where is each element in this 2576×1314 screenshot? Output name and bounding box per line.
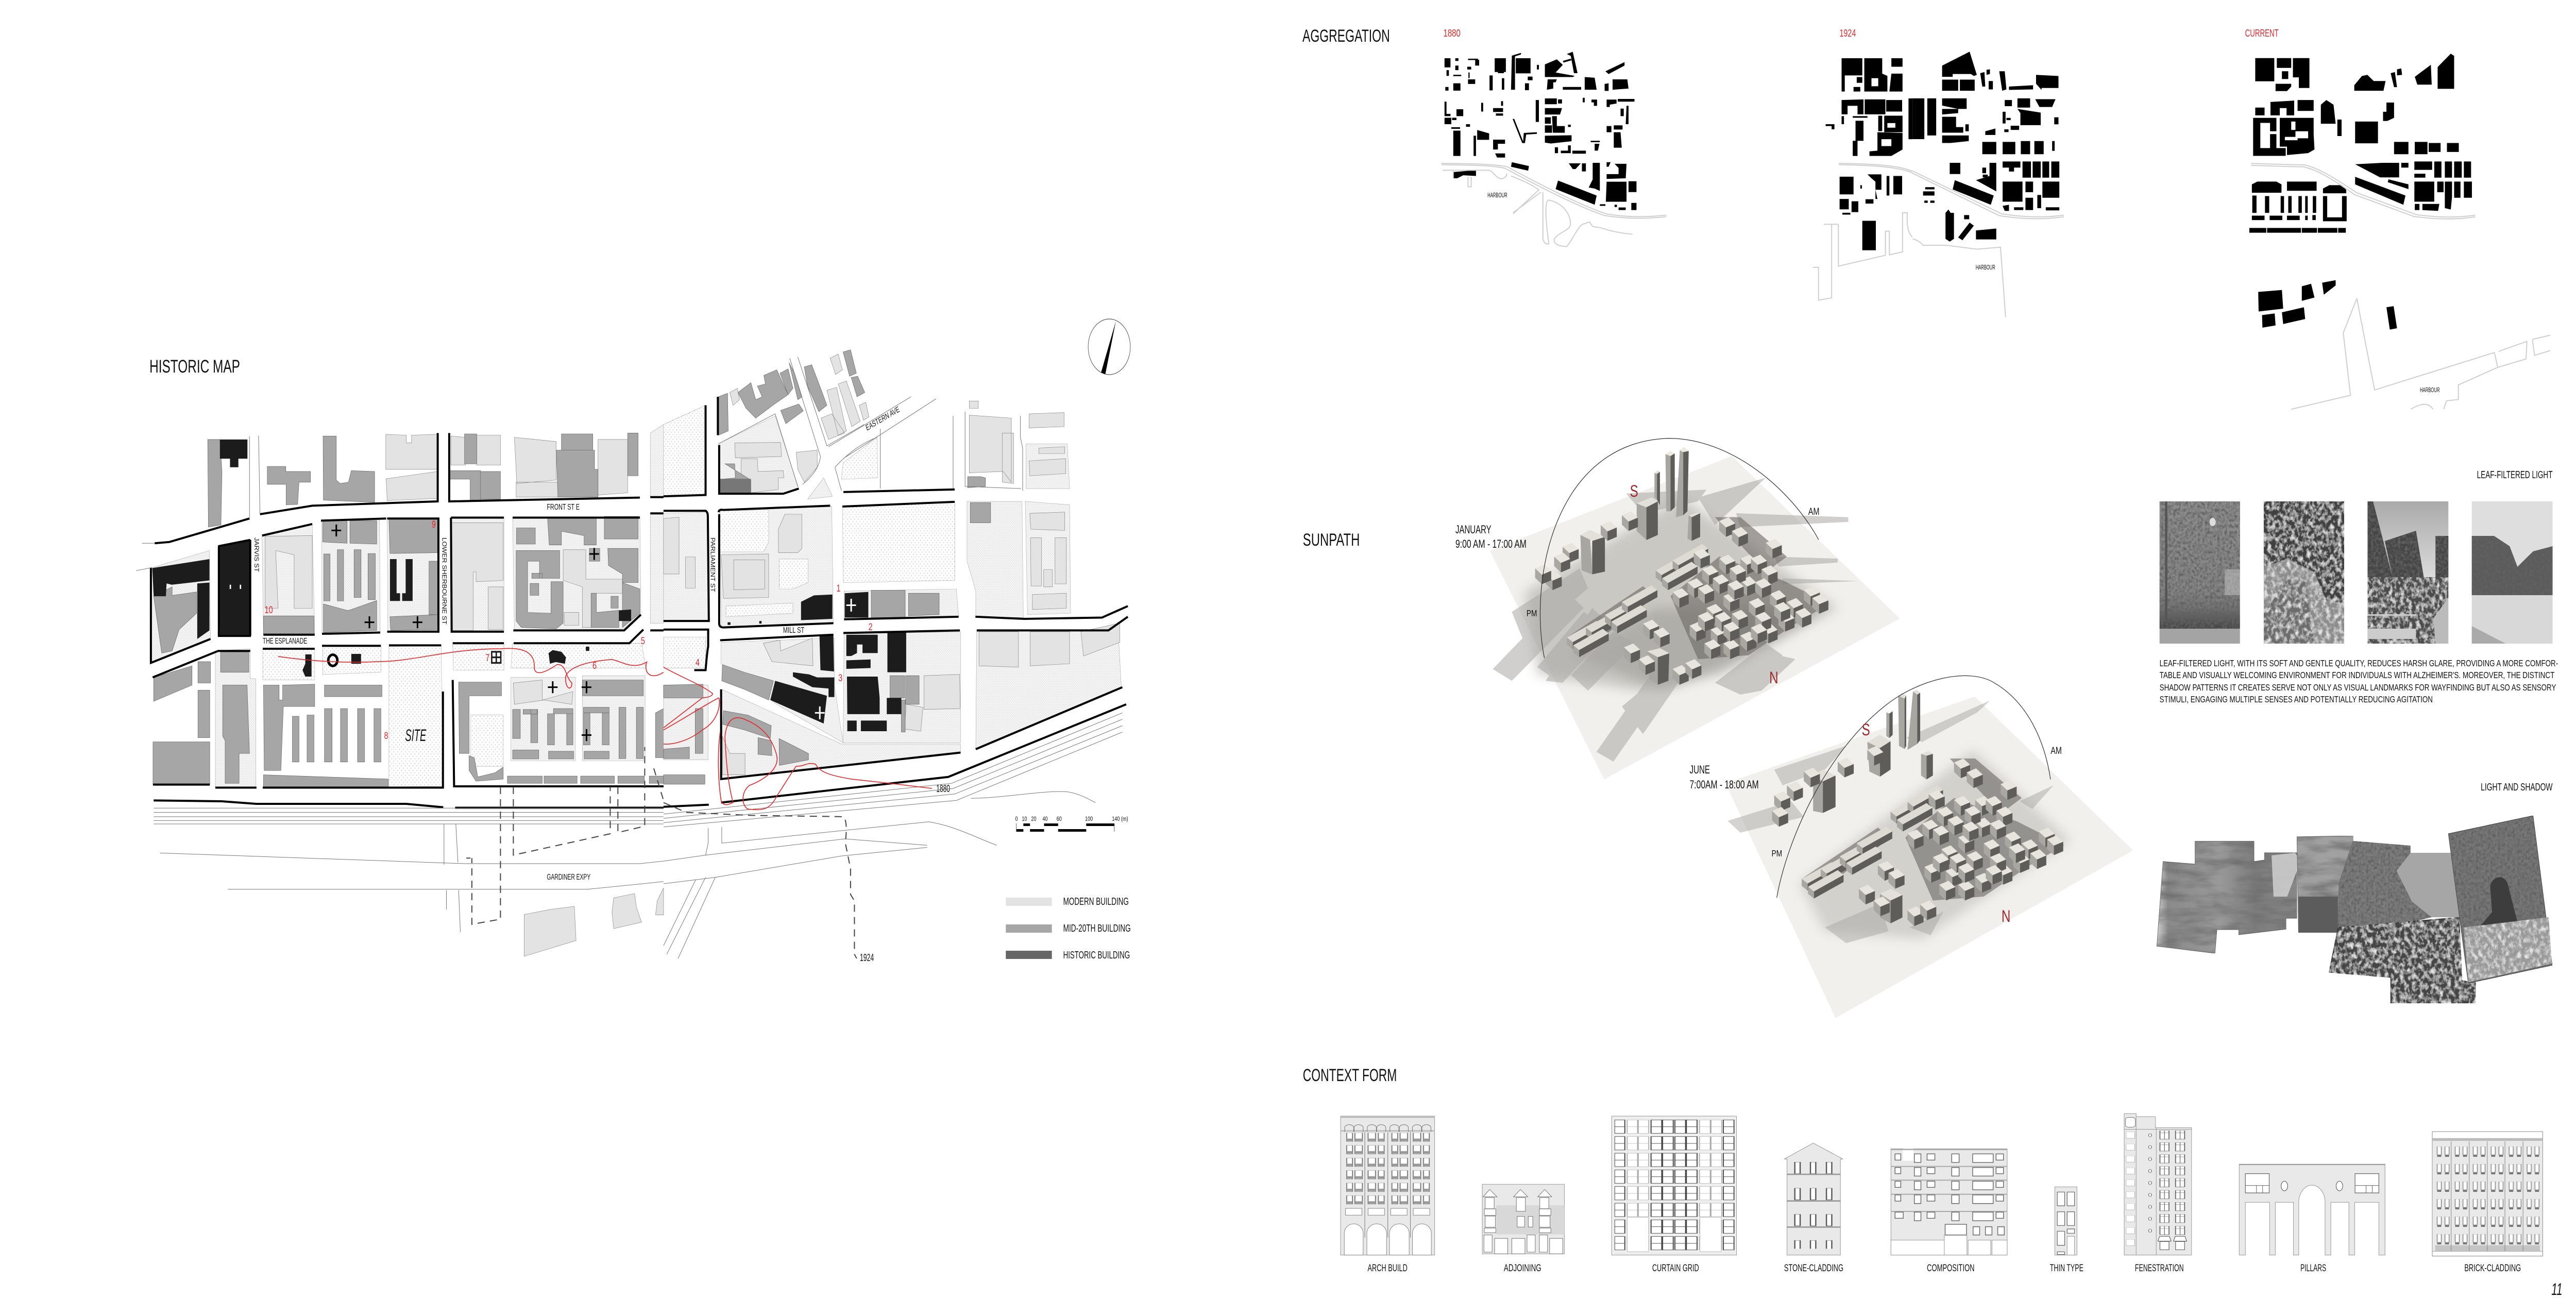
facade labels: CURTAIN GRID xyxy=(1652,1262,1699,1274)
ground plate january xyxy=(1490,456,1900,780)
red building numbers: 3 xyxy=(838,672,842,684)
modern buildings xyxy=(664,354,1120,775)
street labels xyxy=(253,405,901,882)
harbour label 1924: HARBOUR xyxy=(1976,264,1995,271)
harbour label current: HARBOUR xyxy=(2420,387,2440,394)
red building numbers xyxy=(265,519,873,742)
january labels: S xyxy=(1630,482,1638,501)
paragraph: leaf-filtered light: LEAF-FILTERED LIGHT, WITH ITS SOFT AND GENTLE QUALITY, REDUCES HARSH GLARE, PROVIDING A MORE COMFOR- xyxy=(2160,659,2558,669)
street lines xyxy=(664,397,1128,807)
panel: context form xyxy=(1303,1066,2543,1274)
shoreline year labels xyxy=(860,783,950,964)
bright wall piece xyxy=(2272,853,2301,897)
january labels: JANUARY xyxy=(1455,524,1492,536)
white crosses on historic buildings xyxy=(815,599,856,719)
historic buildings xyxy=(152,440,631,677)
facade labels: ARCH BUILD xyxy=(1368,1262,1408,1274)
sun path arc january xyxy=(1540,439,1819,658)
facade: composition xyxy=(1891,1149,2007,1255)
facade labels xyxy=(1368,1262,2521,1274)
shoreline year labels: 1880 xyxy=(936,783,950,795)
stippled block grounds xyxy=(664,416,1122,779)
site label: SITE xyxy=(405,727,427,745)
sky and building piece xyxy=(2297,836,2353,933)
rail tracks and expressway lines xyxy=(136,435,664,932)
heading: historic map: HISTORIC MAP xyxy=(149,356,240,377)
legend: MODERN BUILDING xyxy=(1063,896,1129,907)
june labels: PM xyxy=(1772,849,1782,859)
january labels xyxy=(1455,482,1819,687)
dashed 1924 shoreline xyxy=(664,802,857,958)
stippled block grounds xyxy=(151,425,664,787)
paragraph: leaf-filtered light: STIMULI, ENGAGING MULTIPLE SENSES AND POTENTIALLY REDUCING AGITATION xyxy=(2160,695,2433,705)
crosses and monument marks xyxy=(331,525,599,741)
photo 2: shaded path xyxy=(2264,501,2344,644)
panel: aggregation xyxy=(1302,27,2550,409)
red 1880 shoreline xyxy=(664,667,932,810)
red building numbers: 8 xyxy=(384,730,388,742)
figure-ground map 1880 xyxy=(1442,52,1666,247)
street lines xyxy=(151,433,664,807)
legend xyxy=(1006,896,1131,961)
heading: aggregation: AGGREGATION xyxy=(1302,27,1390,46)
january labels: N xyxy=(1769,669,1778,687)
year label 1924: 1924 xyxy=(1839,27,1856,39)
photo 3: street with tree shadows xyxy=(2367,501,2448,644)
rail tracks and expressway lines xyxy=(664,357,1122,958)
facade: arch build xyxy=(1341,1116,1435,1255)
street labels: JARVIS ST xyxy=(253,537,260,572)
june labels: AM xyxy=(2050,745,2062,756)
blurred collage pieces xyxy=(2157,841,2297,953)
facade labels: FENESTRATION xyxy=(2135,1262,2184,1274)
scale bar xyxy=(1015,816,1128,832)
january shadows xyxy=(1493,478,1859,762)
red building numbers: 9 xyxy=(432,519,436,530)
street labels: THE ESPLANADE xyxy=(263,636,307,646)
harbour label 1880: HARBOUR xyxy=(1487,192,1507,199)
legend: HISTORIC BUILDING xyxy=(1063,949,1130,961)
scale bar: 0 xyxy=(1015,816,1018,822)
3d city model june xyxy=(1725,676,2133,1018)
facade labels: PILLARS xyxy=(2300,1262,2326,1274)
street labels: FRONT ST E xyxy=(547,502,580,512)
dashed 1924 shoreline xyxy=(466,747,664,924)
3d city model january xyxy=(1490,439,1900,780)
red building numbers: 5 xyxy=(641,635,645,647)
scale bar: 140 (m) xyxy=(1112,816,1128,822)
figure-ground map 1924 xyxy=(1813,52,2064,317)
scale bar: 40 xyxy=(1042,816,1048,822)
facade: adjoining xyxy=(1482,1184,1565,1254)
facade: thin type xyxy=(2055,1187,2077,1255)
heading: light and shadow: LIGHT AND SHADOW xyxy=(2481,781,2553,793)
legend: MID-20TH BUILDING xyxy=(1063,922,1131,934)
facade labels: STONE-CLADDING xyxy=(1784,1262,1843,1274)
facade: brick-cladding xyxy=(2432,1132,2543,1256)
june labels: 7:00AM - 18:00 AM xyxy=(1690,779,1759,791)
photo 4: intersection under clouds xyxy=(2472,501,2553,644)
red building numbers: 7 xyxy=(485,652,489,664)
dotted open spaces xyxy=(664,406,955,668)
june labels xyxy=(1690,721,2062,926)
sculpture in dappled shade xyxy=(2448,816,2552,983)
street trees piece xyxy=(2329,841,2476,1003)
red building numbers: 6 xyxy=(592,660,597,671)
low-rise blocks june xyxy=(1802,759,2064,926)
scale bar: 100 xyxy=(1085,816,1093,822)
scale bar: 20 xyxy=(1031,816,1037,822)
street labels: MILL ST xyxy=(783,626,805,635)
scale bar: 10 xyxy=(1022,816,1027,822)
january labels: 9:00 AM - 17:00 AM xyxy=(1455,538,1527,551)
red building numbers: 1 xyxy=(836,583,840,594)
heading: leaf-filtered light: LEAF-FILTERED LIGHT xyxy=(2477,469,2553,481)
facade: pillars xyxy=(2239,1164,2385,1255)
red building numbers: 2 xyxy=(869,621,873,633)
heading: sunpath: SUNPATH xyxy=(1303,531,1360,550)
facade labels: THIN TYPE xyxy=(2050,1262,2083,1274)
facades east group xyxy=(1891,1114,2543,1256)
shoreline and dock lines 1924 xyxy=(1813,163,1912,300)
facade labels: COMPOSITION xyxy=(1927,1262,1975,1274)
street labels: PARLIAMENT ST xyxy=(709,537,716,592)
panel: historic map xyxy=(136,319,1131,964)
june labels: JUNE xyxy=(1690,764,1710,777)
low-rise blocks january xyxy=(1567,517,1829,685)
facade: fenestration xyxy=(2124,1114,2192,1255)
facade: curtain grid xyxy=(1612,1116,1737,1255)
june shadows xyxy=(1727,701,2071,943)
panel: sunpath xyxy=(1303,439,2558,1018)
january labels: PM xyxy=(1527,609,1537,619)
red building numbers: 10 xyxy=(265,604,273,616)
street labels: EASTERN AVE xyxy=(865,405,901,433)
facade labels: BRICK-CLADDING xyxy=(2464,1262,2521,1274)
paragraph: leaf-filtered light: SHADOW PATTERNS IT CREATES SERVE NOT ONLY AS VISUAL LANDMARKS FOR WAYFINDING BUT ALSO AS SENSORY xyxy=(2160,683,2556,693)
ground plate june xyxy=(1725,697,2133,1018)
street labels: LOWER SHERBOURNE ST xyxy=(440,537,448,625)
june labels: N xyxy=(2002,907,2010,926)
mid-20th buildings xyxy=(664,350,991,784)
modern buildings xyxy=(227,434,664,956)
towers january xyxy=(1581,447,1700,685)
facades west group xyxy=(1341,1116,1843,1255)
mid-20th buildings xyxy=(153,433,664,787)
scale bar: 60 xyxy=(1057,816,1062,822)
paragraph: leaf-filtered light xyxy=(2160,659,2558,705)
dotted open spaces xyxy=(263,643,646,787)
sun path arc june xyxy=(1777,676,2050,898)
red building numbers: 4 xyxy=(696,657,700,668)
photo 1: park trees xyxy=(2160,501,2240,644)
map west half: blocks, buildings and roads xyxy=(136,425,664,956)
facade: stone-cladding xyxy=(1784,1143,1843,1255)
shoreline and dock lines current xyxy=(2251,163,2550,409)
year label current: CURRENT xyxy=(2245,27,2279,39)
photo collage: light and shadow xyxy=(2157,816,2552,1003)
figure-ground map current xyxy=(2249,54,2550,409)
year label 1880: 1880 xyxy=(1444,27,1461,39)
icon: north compass xyxy=(1088,319,1130,375)
historic buildings xyxy=(727,592,906,731)
page number: 11 xyxy=(2551,1281,2562,1299)
street labels: GARDINER EXPY xyxy=(547,872,591,882)
photo strip: leaf-filtered light xyxy=(2160,501,2553,644)
shoreline and rail lines 1880 xyxy=(1442,163,1666,247)
map east half: blocks, buildings and roads xyxy=(664,350,1128,958)
red 1880 shoreline xyxy=(278,648,664,688)
january labels: AM xyxy=(1808,506,1819,517)
towers june xyxy=(1813,690,1933,923)
facade labels: ADJOINING xyxy=(1504,1262,1541,1274)
paragraph: leaf-filtered light: TABLE AND VISUALLY WELCOMING ENVIRONMENT FOR INDIVIDUALS WITH ALZHEIMER'S. MOREOVER, THE DISTINCT xyxy=(2160,670,2555,681)
heading: context form: CONTEXT FORM xyxy=(1303,1066,1397,1085)
shoreline year labels: 1924 xyxy=(860,952,874,964)
june labels: S xyxy=(1862,721,1870,739)
